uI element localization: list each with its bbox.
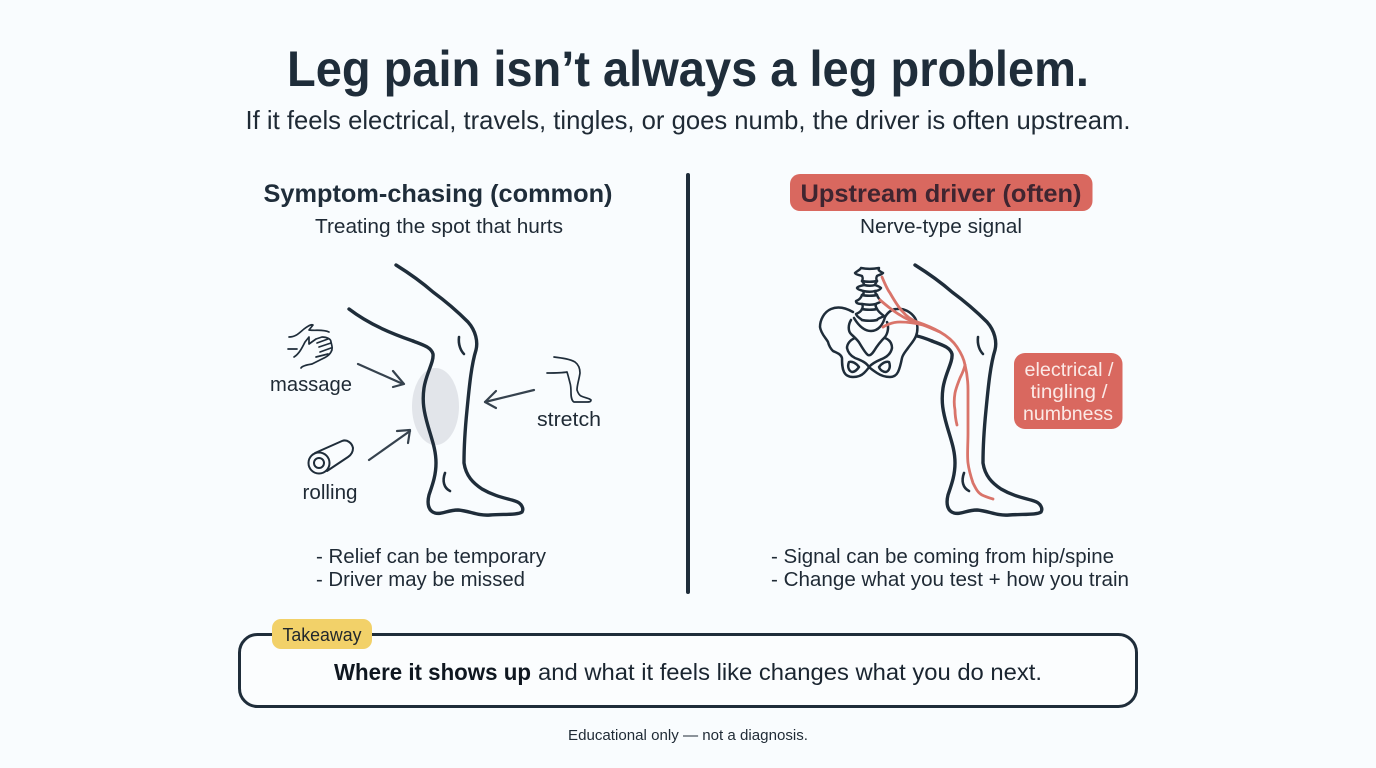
left ilium [820,308,869,377]
leg outline [349,265,523,515]
bullets: symptom-chasing [316,546,546,591]
obturator openings [848,362,859,372]
title: Leg pain isn’t always a leg problem. [287,41,1089,97]
bullets: symptom-chasing: - Driver may be missed [316,569,525,591]
takeaway box [240,619,1136,706]
icon: foam roller [308,440,353,474]
panel: symptom-chasing [264,180,612,591]
panel: upstream driver [771,174,1129,591]
label: massage: massage [270,374,352,396]
takeaway badge: Takeaway [282,625,362,645]
takeaway text: and what it feels like changes what you do next. [538,659,1042,685]
heading pill: upstream driver: Upstream driver (often) [800,180,1082,208]
subheading: treating the spot: Treating the spot that hurts [315,216,563,238]
arrow: stretch [485,390,534,408]
inner rings [847,338,869,367]
heading: symptom-chasing: Symptom-chasing (common) [264,180,612,208]
callout: electrical tingling numbness [1014,353,1122,429]
callout: electrical tingling numbness: numbness [1023,404,1113,425]
leg outline [915,265,1042,515]
icon: massage hands [288,325,332,368]
icon: mini leg stretch [547,357,591,402]
bullets: upstream driver: - Change what you test + how you train [771,569,1129,591]
callout: electrical tingling numbness: tingling / [1030,382,1108,403]
icon: spine and pelvis [820,268,917,377]
pain area highlight [412,368,459,445]
sacrum [849,320,888,355]
bullets: upstream driver [771,546,1129,591]
vertebrae [855,268,883,282]
arrow: rolling [369,430,410,460]
takeaway text: Where it shows up [334,659,531,685]
center divider [686,173,690,594]
takeaway badge [272,619,372,649]
heading pill: upstream driver [790,174,1092,211]
label: rolling: rolling [302,482,358,504]
bullets: upstream driver: - Signal can be coming from hip/spine [771,546,1114,568]
sacrum top [854,317,885,331]
nerve path [880,277,993,499]
label: stretch: stretch [537,409,601,431]
footer disclaimer: Educational only — not a diagnosis. [568,727,808,744]
bullets: symptom-chasing: - Relief can be temporary [316,546,546,568]
arrow: massage [358,364,404,387]
callout: electrical tingling numbness: electrical / [1024,360,1114,381]
subtitle: If it feels electrical, travels, tingles, or goes numb, the driver is often upstream. [246,105,1130,135]
subheading: nerve-type signal: Nerve-type signal [860,216,1022,238]
right ilium [869,309,917,377]
